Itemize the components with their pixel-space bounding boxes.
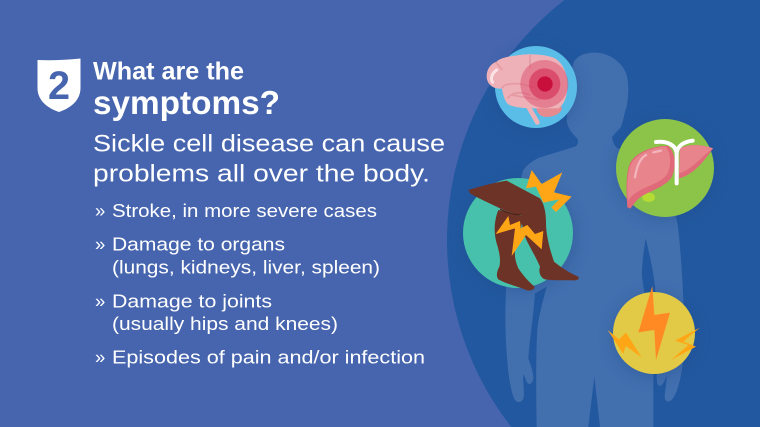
symptoms list: (usually hips and knees) bbox=[112, 313, 338, 334]
symptoms list: (lungs, kidneys, liver, spleen) bbox=[112, 256, 380, 278]
background circle bbox=[447, 0, 760, 427]
symptoms list: » bbox=[95, 290, 105, 312]
heading: symptoms? bbox=[93, 84, 280, 121]
icon: liver bbox=[615, 119, 715, 220]
symptoms list: Episodes of pain and/or infection bbox=[112, 346, 425, 367]
intro text: Sickle cell disease can cause bbox=[93, 130, 445, 158]
icon: brain bbox=[487, 46, 578, 132]
symptoms list: Damage to joints bbox=[112, 290, 272, 312]
heading: What are the bbox=[93, 58, 244, 86]
icon: pain bolts bbox=[608, 286, 700, 378]
symptoms list: Damage to organs bbox=[112, 234, 285, 255]
shield badge with number: 2 bbox=[48, 64, 70, 108]
intro text bbox=[93, 130, 445, 188]
symptoms list: » bbox=[95, 234, 105, 255]
heading bbox=[93, 58, 280, 121]
body silhouette bbox=[505, 53, 684, 427]
symptoms list bbox=[95, 200, 425, 367]
symptoms list: » bbox=[95, 346, 105, 367]
shield badge with number bbox=[38, 58, 80, 112]
icon: legs with pain bolts bbox=[463, 170, 579, 292]
symptoms list: » bbox=[95, 200, 105, 221]
symptoms list: Stroke, in more severe cases bbox=[112, 200, 377, 221]
intro text: problems all over the body. bbox=[93, 161, 430, 188]
